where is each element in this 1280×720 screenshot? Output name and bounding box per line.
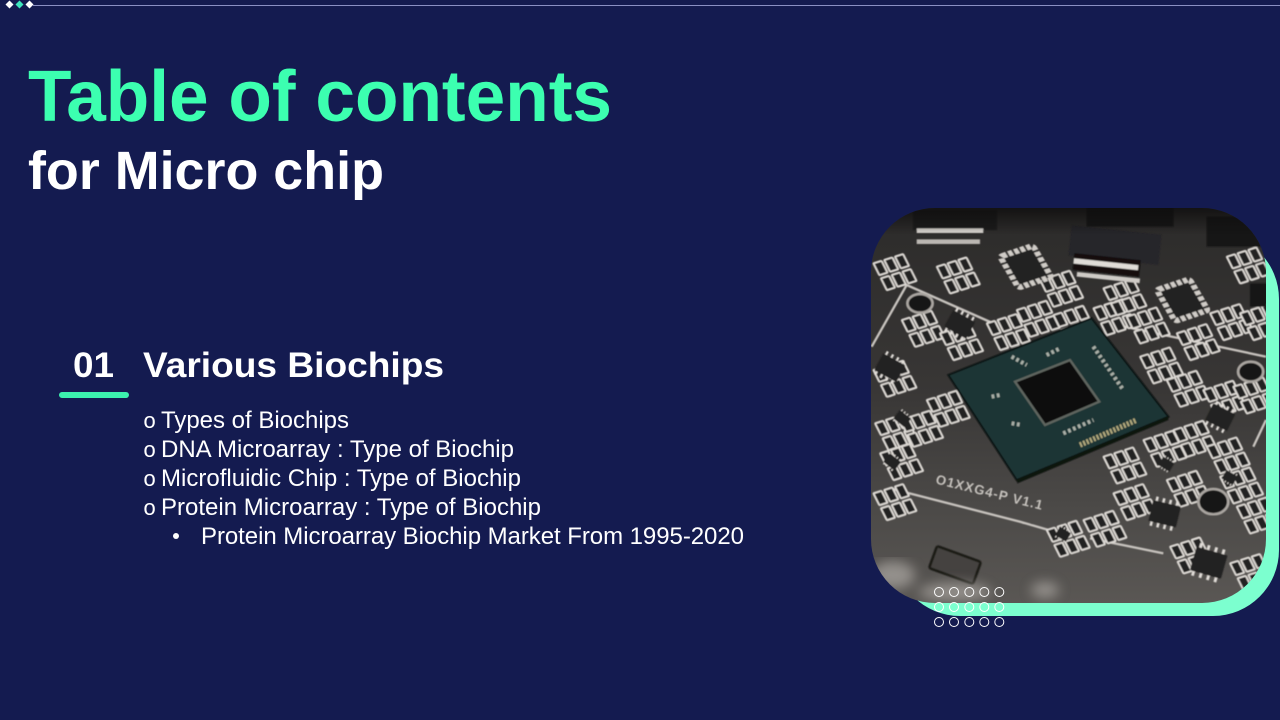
contents list <box>143 407 744 550</box>
mint frame behind photo <box>894 233 1279 616</box>
title <box>28 57 612 201</box>
top focus shadow <box>891 208 1234 232</box>
board label: O1XXG4-P V1.1 <box>934 472 1045 513</box>
section number: 01 <box>73 346 114 385</box>
board traces <box>872 285 1266 553</box>
chip die <box>1015 360 1099 425</box>
bottom blurred highlights <box>871 561 1059 601</box>
subheading: for Micro chip: for Micro chip <box>28 141 384 201</box>
photo: circuit board with microchip <box>871 207 1280 603</box>
sub-item: market 1995-2020: Protein Microarray Biochip Market From 1995-2020 <box>201 523 744 550</box>
section: 01 Various Biochips <box>59 346 444 398</box>
mounting holes <box>907 294 1263 514</box>
item: DNA Microarray: DNA Microarray : Type of Biochip <box>161 436 514 463</box>
item: Microfluidic Chip: Microfluidic Chip : Type of Biochip <box>161 465 521 492</box>
item: Types of Biochips: Types of Biochips <box>161 407 349 434</box>
square pad rings <box>1000 246 1208 321</box>
number underline <box>59 392 129 398</box>
top connector chips <box>913 207 1267 307</box>
pad clusters <box>873 247 1280 590</box>
dot grid decoration <box>934 588 1004 626</box>
item: DNA Microarray: o <box>143 439 156 464</box>
item: Protein Microarray: o <box>143 497 156 522</box>
microchip substrate <box>948 318 1168 483</box>
top decoration: diamonds and line <box>6 0 1280 8</box>
heading: Table of contents: Table of contents <box>28 57 612 137</box>
section heading: Various Biochips <box>143 346 444 385</box>
item: Protein Microarray: Protein Microarray : Type of Biochip <box>161 494 541 521</box>
surface mount components <box>872 307 1239 584</box>
item: Types of Biochips: o <box>143 410 156 435</box>
item: Microfluidic Chip: o <box>143 468 156 493</box>
chip contacts <box>1080 420 1137 445</box>
